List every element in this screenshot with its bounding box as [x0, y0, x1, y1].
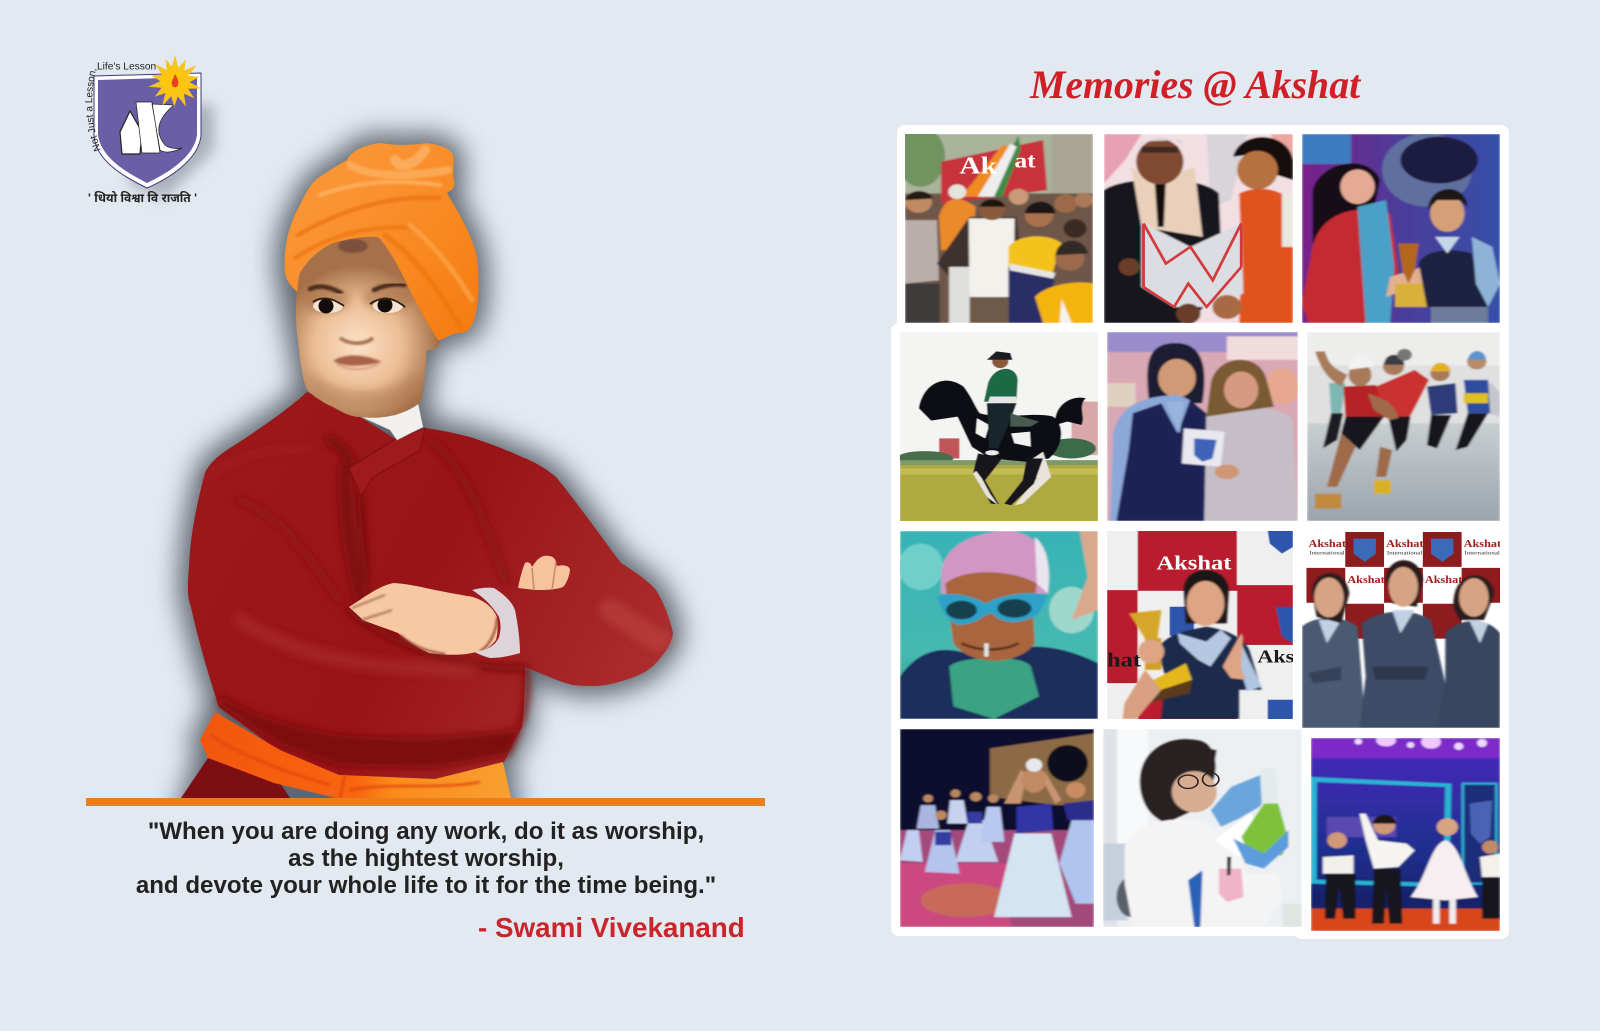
photo: science lab — [1103, 729, 1302, 927]
backdrop subtext 1: International — [1309, 550, 1345, 556]
photo: three students — [1302, 532, 1501, 728]
sign lettering: Ak — [959, 152, 997, 179]
logo letter K — [136, 102, 182, 153]
collar — [357, 403, 423, 440]
robe folds — [205, 440, 660, 768]
award scene — [1302, 133, 1500, 323]
logo hindi motto: ' धियो विश्वा वि राजति ' — [88, 190, 197, 205]
skating scene — [1307, 332, 1500, 521]
winner backdrop — [1107, 531, 1293, 719]
photo: book presentation — [1107, 332, 1298, 521]
photo: flag rally — [905, 134, 1093, 323]
hand — [349, 583, 498, 655]
backdrop text 5: Akshat — [1425, 575, 1463, 586]
robe lower — [181, 758, 290, 798]
backdrop subtext 2: International — [1387, 550, 1423, 556]
stage scene — [1311, 734, 1500, 931]
book scene — [1107, 332, 1298, 521]
gallery title: Memories @ Akshat — [1029, 63, 1362, 107]
dance scene — [900, 729, 1094, 927]
rally scene — [896, 127, 1093, 323]
eyebrows — [310, 284, 404, 293]
glasses — [1178, 773, 1219, 788]
photo: roller skaters — [1307, 332, 1500, 521]
three girls — [1302, 560, 1500, 728]
photo: certificate presentation — [1104, 134, 1293, 323]
orange divider bar — [86, 798, 765, 806]
logo motto top: Life's Lesson — [97, 62, 156, 72]
hand shading — [352, 595, 497, 654]
fingers — [518, 556, 570, 590]
backdrop lettering lower: hat — [1107, 649, 1142, 671]
logo pen nib — [120, 111, 142, 154]
shirt cuff — [472, 588, 520, 658]
certificate scene — [1104, 134, 1293, 324]
photo: children on stage — [1311, 738, 1500, 931]
frame lower right — [1294, 730, 1509, 939]
logo shield shadow — [130, 100, 214, 198]
sign lettering end: at — [1015, 149, 1036, 173]
backdrop lettering right: Aks — [1257, 647, 1294, 667]
eyes — [313, 298, 405, 314]
backdrop text 1: Akshat — [1309, 539, 1346, 550]
chest flap — [349, 428, 425, 496]
photo: horse riding — [900, 332, 1098, 521]
sash — [200, 712, 511, 798]
logo sun — [148, 55, 202, 108]
photo: trophy winner — [1107, 531, 1294, 719]
portrait shadow — [181, 143, 673, 830]
turban — [285, 143, 478, 340]
portrait: Swami Vivekanand — [181, 143, 673, 830]
logo — [85, 55, 221, 205]
photo: trophy award — [1302, 134, 1500, 323]
turban folds — [295, 150, 472, 330]
logo motto side guide — [92, 62, 101, 150]
photo: stage dancers — [900, 729, 1094, 927]
lab scene — [1103, 729, 1302, 927]
photo: swimmer — [900, 531, 1098, 719]
certificate red zigzag — [1144, 223, 1241, 307]
backdrop lettering: Akshat — [1156, 552, 1232, 574]
quote line 1: "When you are doing any work, do it as worship, — [148, 818, 704, 845]
frame main — [891, 323, 1509, 936]
logo shield inner — [98, 77, 197, 183]
backdrop text 2: Akshat — [1386, 539, 1424, 550]
robe — [188, 392, 673, 779]
backdrop subtext 3: International — [1464, 550, 1500, 556]
backdrop text 4: Akshat — [1347, 575, 1385, 586]
neck and face — [296, 237, 440, 418]
frame top — [897, 125, 1509, 345]
nose and mouth — [333, 338, 382, 369]
logo shield — [94, 73, 201, 188]
swimmer scene — [898, 531, 1098, 719]
sash folds — [210, 735, 480, 798]
horse scene — [896, 332, 1098, 521]
checker backdrop — [1302, 531, 1500, 639]
backdrop text 3: Akshat — [1464, 539, 1501, 550]
winner girl and trophy — [1123, 570, 1262, 719]
quote line 3: and devote your whole life to it for the time being." — [136, 872, 716, 899]
quote line 2: as the hightest worship, — [288, 845, 564, 872]
quote text — [136, 818, 716, 899]
hair mark — [338, 239, 368, 253]
finger lines — [532, 562, 556, 590]
quote attribution: - Swami Vivekanand — [478, 912, 745, 943]
logo side text: Not Just a Lesson, — [85, 69, 101, 152]
eye socket shading — [302, 285, 418, 408]
gallery white frame — [891, 125, 1509, 939]
